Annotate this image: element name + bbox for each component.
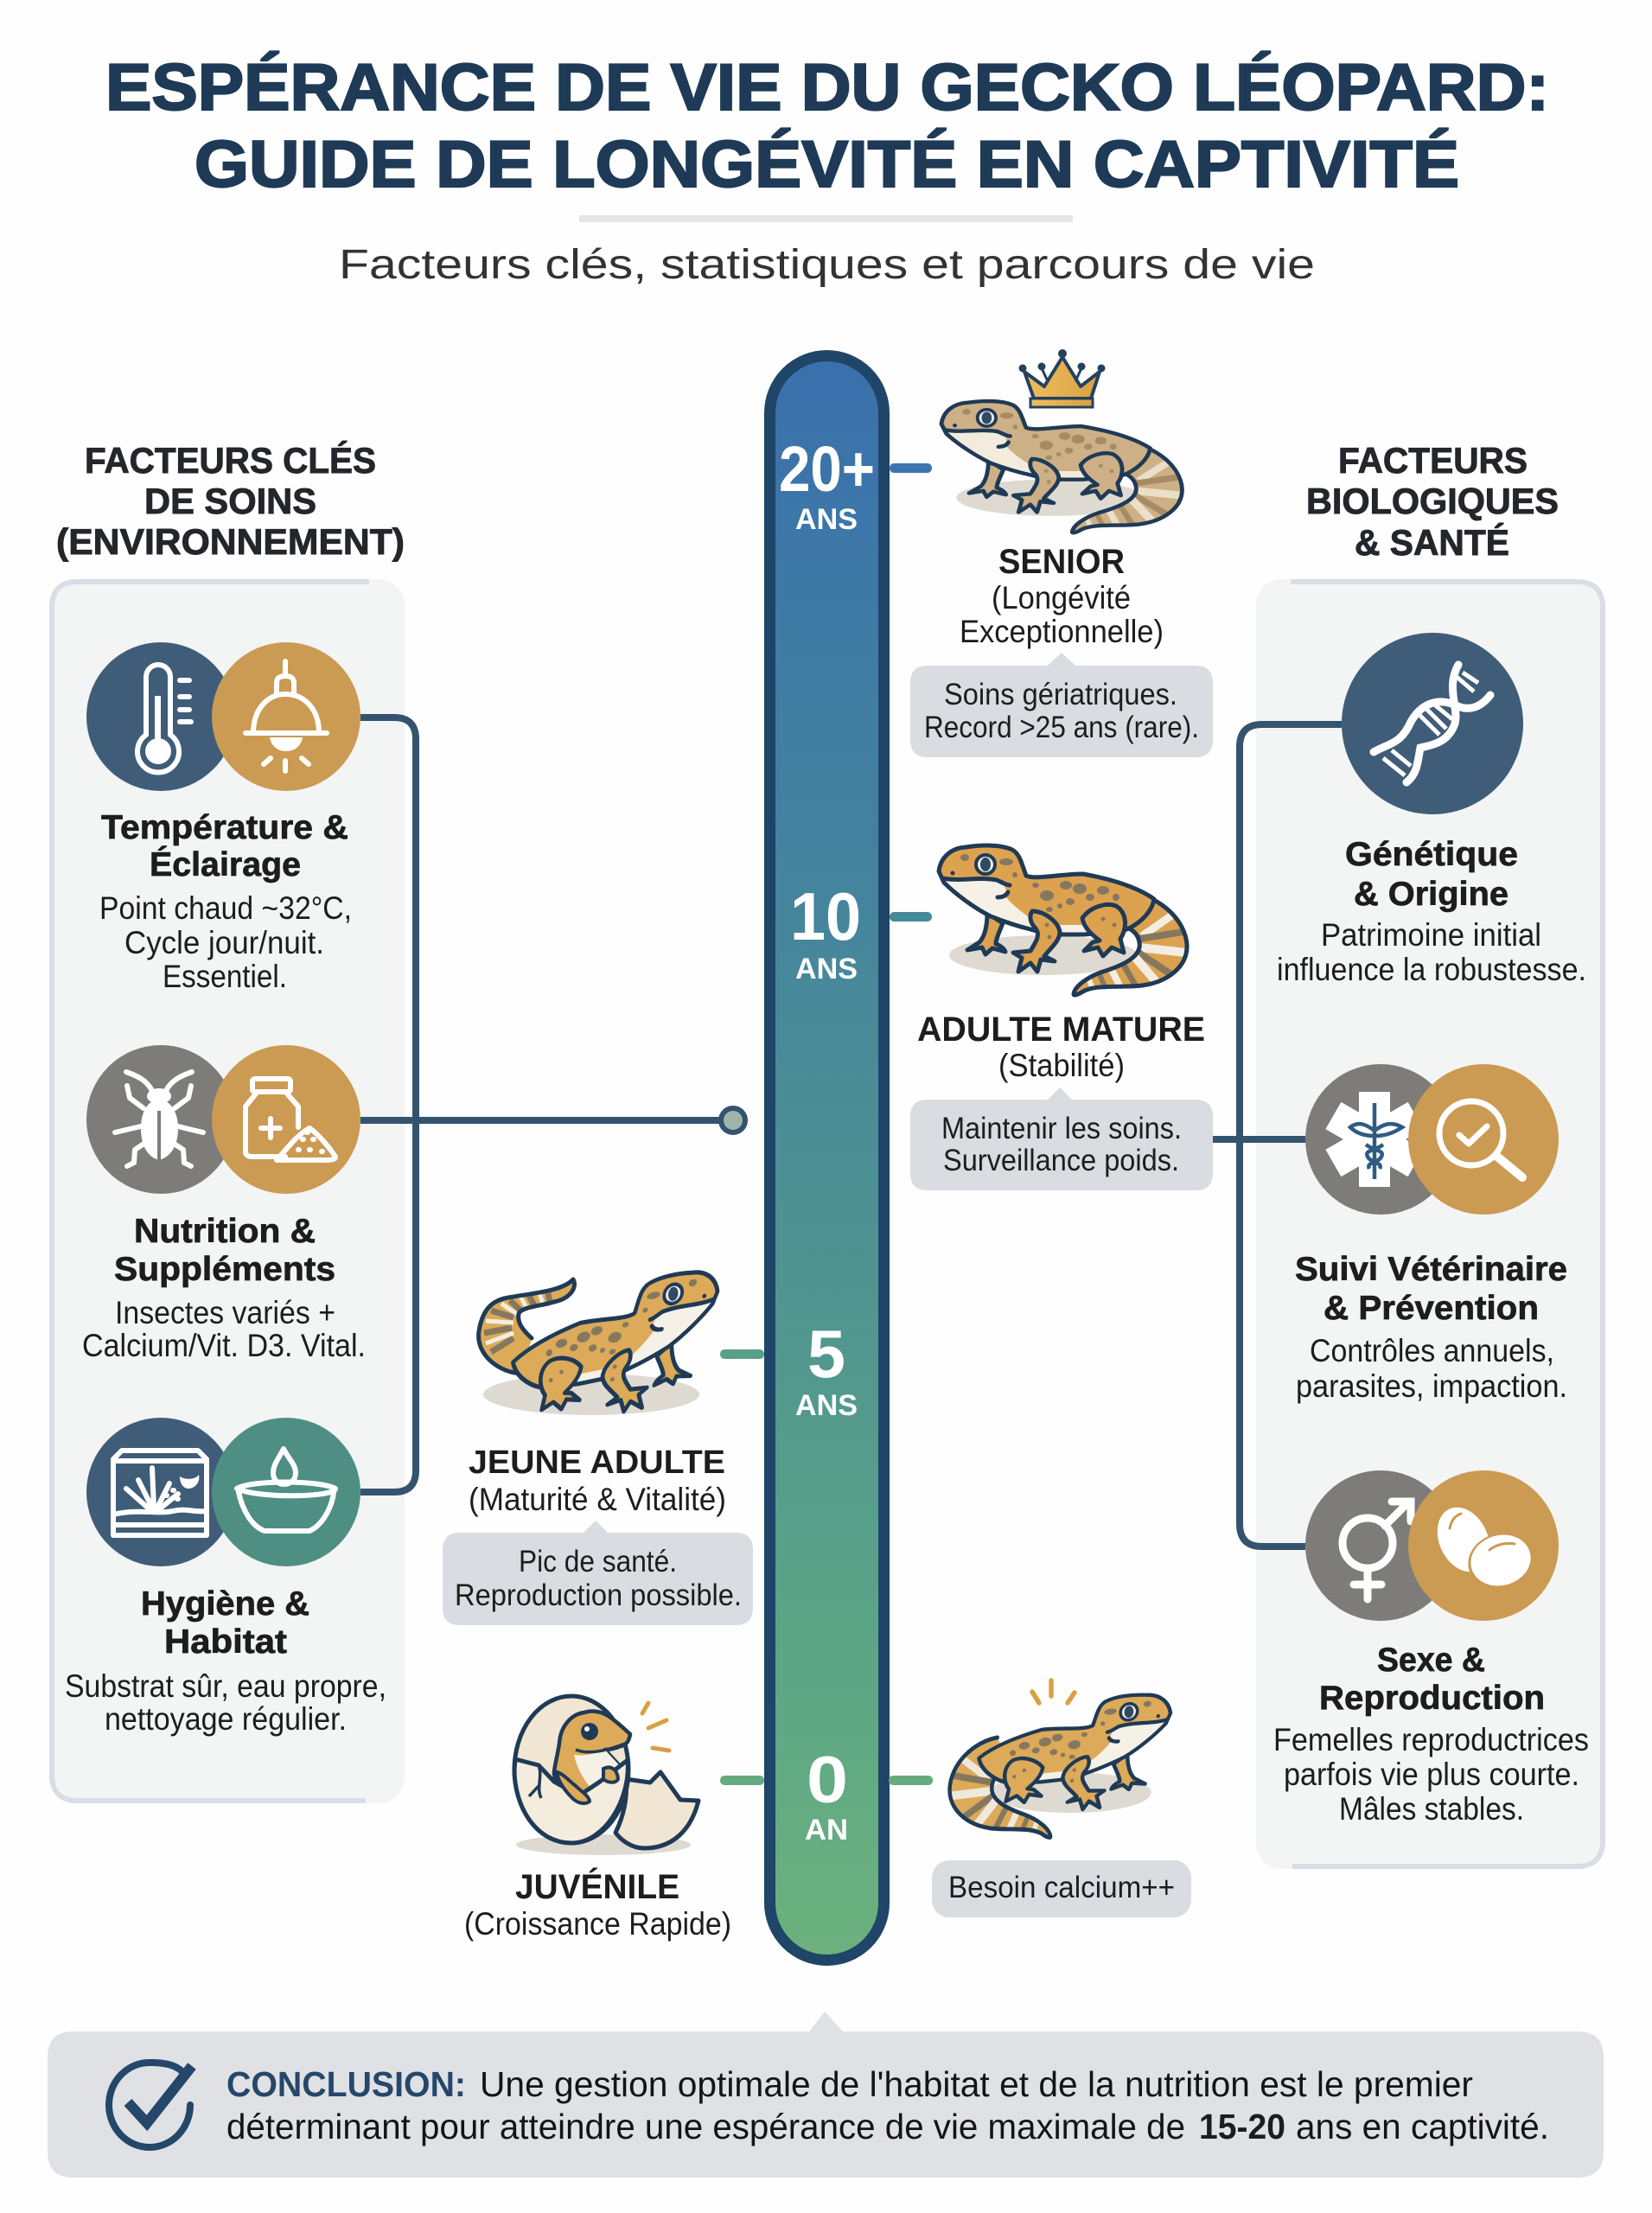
text: temperature and lighting: Point chaud ~32°C, — [99, 890, 352, 926]
text: conclusion: déterminant pour atteindre une espérance de vie maximale de — [226, 2107, 1185, 2146]
label: 20+ ans — [779, 433, 875, 536]
text: hygiene and habitat: Hygiène & — [141, 1585, 309, 1623]
callout: mature adult: Maintenir les soins. — [941, 1112, 1182, 1145]
label: 10 ans: ANS — [795, 953, 858, 985]
text: nutrition and supplements: Insectes variés + — [115, 1295, 335, 1330]
tick: 0 right — [889, 1776, 933, 1785]
icon: star of life — [1305, 1064, 1456, 1215]
text: conclusion: CONCLUSION: — [226, 2064, 466, 2104]
text: temperature and lighting — [99, 809, 352, 994]
heading: biological factors: & SANTÉ — [1355, 522, 1509, 563]
text: temperature and lighting: Essentiel. — [163, 959, 287, 994]
text: nutrition and supplements — [82, 1213, 366, 1363]
text: genetics: influence la robustesse. — [1277, 952, 1586, 987]
label: senior: SENIOR — [998, 543, 1125, 581]
text: conclusion: Une gestion optimale de l'habitat et de la nutrition est le premier — [480, 2064, 1473, 2104]
item: nutrition and supplements — [82, 1045, 366, 1363]
callout: senior: Soins gériatriques. — [944, 678, 1177, 711]
text: veterinary follow-up: parasites, impaction. — [1296, 1368, 1567, 1404]
text: veterinary follow-up: & Prévention — [1324, 1290, 1539, 1327]
panel: conclusion — [48, 2012, 1604, 2178]
icon: insect — [86, 1045, 235, 1194]
icon: crown — [1018, 349, 1105, 407]
text: sex and reproduction: Sexe & — [1377, 1642, 1485, 1679]
text: veterinary follow-up — [1295, 1251, 1567, 1404]
front shell — [514, 1759, 628, 1843]
callout: calcium need: Besoin calcium++ — [948, 1871, 1175, 1904]
text: genetics: Patrimoine initial — [1321, 917, 1541, 953]
item: hygiene and habitat — [65, 1418, 386, 1737]
callout: young adult: Reproduction possible. — [455, 1578, 742, 1612]
stage: mature adult — [910, 845, 1213, 1190]
label: mature adult — [917, 1011, 1205, 1083]
label: young adult: JEUNE ADULTE — [469, 1445, 725, 1481]
illustration: young adult gecko — [479, 1266, 718, 1435]
callout: young adult — [443, 1521, 753, 1625]
text: conclusion — [226, 2064, 1549, 2146]
label: juvenile: (Croissance Rapide) — [464, 1906, 731, 1942]
label: 5 ans — [795, 1316, 858, 1422]
icon: eggs — [1408, 1470, 1559, 1621]
text: conclusion: 15-20 — [1199, 2107, 1285, 2146]
text: nutrition and supplements: Calcium/Vit. D3. Vital. — [82, 1328, 366, 1363]
callout: mature adult: Surveillance poids. — [943, 1144, 1179, 1177]
text: veterinary follow-up: Suivi Vétérinaire — [1295, 1251, 1567, 1288]
text: sex and reproduction: Femelles reproductrices — [1273, 1722, 1589, 1757]
label: 5 ans: 5 — [807, 1316, 845, 1392]
timeline thermometer bar — [720, 356, 933, 1961]
text: hygiene and habitat: Habitat — [164, 1623, 287, 1661]
title — [105, 51, 1549, 201]
heading: care factors: DE SOINS — [144, 481, 316, 521]
icon: gender symbol — [1305, 1470, 1456, 1621]
label: young adult: (Maturité & Vitalité) — [469, 1482, 726, 1517]
label: juvenile — [464, 1867, 731, 1942]
illustration: juvenile gecko — [943, 1680, 1170, 1838]
label: 0 an — [805, 1744, 848, 1846]
panel: biological factors — [1213, 579, 1605, 1869]
tick: 20+ — [890, 463, 932, 473]
tick: 0 left — [720, 1776, 764, 1785]
text: sex and reproduction: Mâles stables. — [1339, 1791, 1524, 1827]
text: nutrition and supplements: Suppléments — [114, 1251, 335, 1288]
text: hygiene and habitat: Substrat sûr, eau propre, — [65, 1668, 386, 1704]
connector: care factors to timeline — [360, 717, 745, 1492]
text: temperature and lighting: Éclairage — [150, 845, 301, 883]
heading: biological factors — [1306, 440, 1559, 563]
heading: care factors — [56, 440, 405, 562]
stage: juvenile — [464, 1680, 1191, 1942]
icon: thermometer — [86, 642, 235, 791]
text: genetics: & Origine — [1354, 876, 1508, 913]
callout: senior: Record >25 ans (rare). — [924, 711, 1199, 744]
text: veterinary follow-up: Contrôles annuels, — [1310, 1333, 1554, 1368]
heading: biological factors: FACTEURS — [1338, 440, 1528, 481]
connector: biological factors to timeline — [1213, 724, 1342, 1547]
text: sex and reproduction: Reproduction — [1319, 1680, 1545, 1717]
heading: biological factors: BIOLOGIQUES — [1306, 481, 1559, 521]
label: senior: Exceptionnelle) — [960, 614, 1164, 649]
tick: 10 — [890, 912, 932, 922]
illustration: senior gecko — [941, 401, 1189, 533]
text: temperature and lighting: Cycle jour/nuit. — [124, 925, 324, 960]
illustration: mature adult gecko — [939, 845, 1194, 995]
icon: heat lamp — [212, 642, 360, 791]
label: juvenile: JUVÉNILE — [515, 1867, 679, 1906]
label: 0 an: AN — [805, 1814, 848, 1846]
label: senior — [960, 543, 1164, 649]
stage: senior — [910, 349, 1213, 757]
title: GUIDE DE LONGÉVITÉ EN CAPTIVITÉ — [195, 128, 1459, 201]
text: hygiene and habitat: nettoyage régulier. — [105, 1701, 347, 1737]
label: 10 ans — [790, 878, 861, 985]
item: temperature and lighting — [86, 642, 360, 994]
icon: terrarium — [86, 1418, 235, 1566]
item: sex and reproduction — [1273, 1470, 1589, 1827]
illustration: hatching egg — [514, 1696, 698, 1855]
heading: care factors: (ENVIRONNEMENT) — [56, 521, 405, 562]
icon: supplement jar — [212, 1045, 360, 1194]
text: genetics — [1277, 836, 1586, 987]
icon: magnifier check — [1408, 1064, 1559, 1215]
label: 20+ ans: ANS — [795, 503, 858, 536]
label: 10 ans: 10 — [790, 878, 861, 954]
title: ESPÉRANCE DE VIE DU GECKO LÉOPARD: — [105, 51, 1549, 124]
callout: young adult: Pic de santé. — [519, 1545, 677, 1578]
callout: senior — [910, 653, 1213, 757]
text: sex and reproduction: parfois vie plus courte. — [1284, 1757, 1579, 1792]
icon: check mark — [109, 2063, 192, 2147]
text: sex and reproduction — [1273, 1642, 1589, 1827]
label: 20+ ans: 20+ — [779, 433, 875, 505]
stage: young adult — [443, 1266, 753, 1625]
text: temperature and lighting: Température & — [101, 809, 348, 846]
label: young adult — [469, 1445, 726, 1517]
icon: water bowl — [212, 1418, 360, 1566]
label: 0 an: 0 — [807, 1744, 848, 1817]
tick: 5 — [720, 1349, 764, 1359]
text: genetics: Génétique — [1345, 836, 1518, 873]
subtitle: Facteurs clés, statistiques et parcours de vie — [339, 242, 1315, 288]
label: mature adult: ADULTE MATURE — [917, 1011, 1205, 1049]
panel: care factors — [49, 579, 405, 1803]
text: hygiene and habitat — [65, 1585, 386, 1737]
item: genetics — [1277, 633, 1586, 987]
text: nutrition and supplements: Nutrition & — [134, 1213, 316, 1250]
label: senior: (Longévité — [992, 580, 1131, 615]
text: conclusion: ans en captivité. — [1296, 2107, 1549, 2146]
callout: mature adult — [910, 1087, 1213, 1190]
icon: dna — [1342, 633, 1523, 814]
callout: calcium need — [932, 1860, 1191, 1917]
label: 5 ans: ANS — [795, 1389, 858, 1422]
item: veterinary follow-up — [1295, 1064, 1567, 1404]
label: mature adult: (Stabilité) — [998, 1048, 1125, 1083]
heading: care factors: FACTEURS CLÉS — [85, 440, 376, 481]
